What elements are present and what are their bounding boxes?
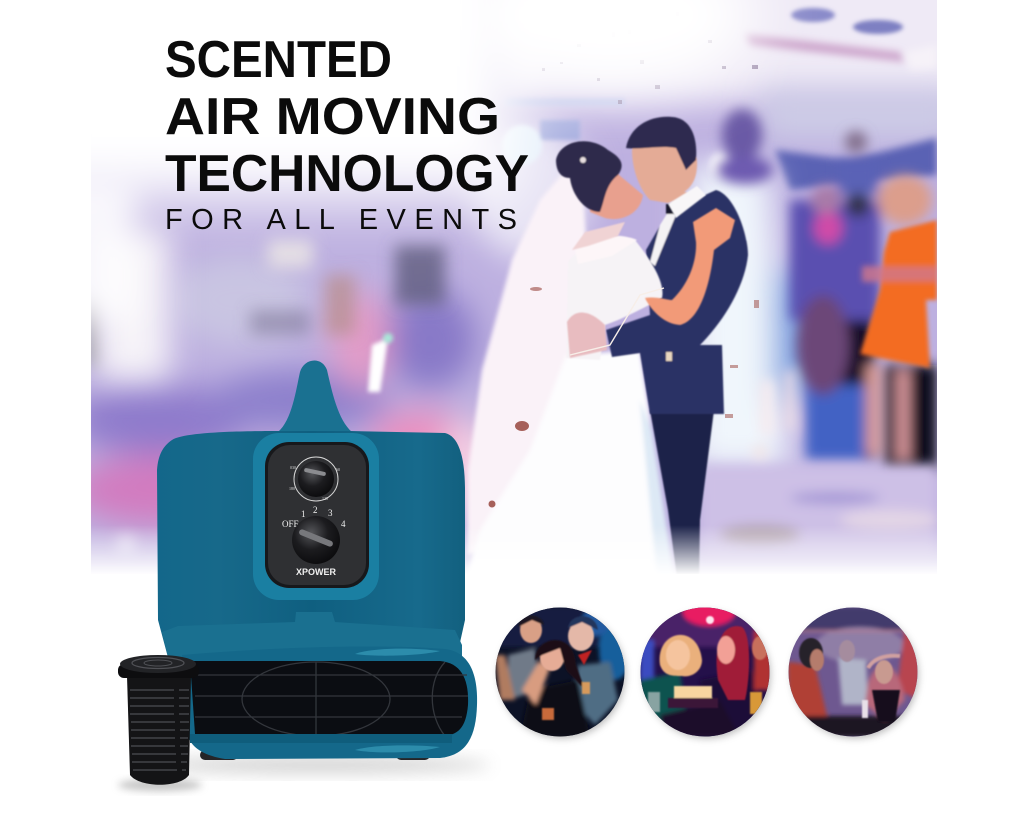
bride bodice xyxy=(578,235,664,359)
brand: XPOWER xyxy=(296,567,336,578)
bride arm xyxy=(645,208,735,325)
timer knob xyxy=(298,461,334,497)
blurred crowd left xyxy=(86,240,445,551)
main housing xyxy=(157,431,465,665)
title line 2: AIR MOVING xyxy=(165,88,500,146)
timer labels: 60 xyxy=(336,467,340,472)
control panel xyxy=(265,442,369,588)
front outlet lip xyxy=(182,647,477,759)
groom neck and face xyxy=(626,117,706,218)
groom trousers xyxy=(650,410,714,585)
timer dial ring xyxy=(294,457,338,501)
scent cartridge xyxy=(118,655,199,785)
speed labels: 2 xyxy=(313,505,318,515)
fade overlays xyxy=(20,0,760,320)
couple xyxy=(462,117,759,590)
crowd right xyxy=(717,109,937,470)
confetti on dress xyxy=(488,287,759,508)
top right ceiling xyxy=(500,0,980,190)
timer labels: 030 xyxy=(290,465,296,470)
bride dress skirt xyxy=(470,350,672,570)
grille xyxy=(195,662,468,736)
bride veil xyxy=(467,168,590,555)
blower shadow xyxy=(150,757,490,773)
bottom fade xyxy=(91,525,937,575)
bright glow behind groom xyxy=(690,160,815,470)
groom hand on bride back xyxy=(567,313,607,358)
scent cartridge shadow xyxy=(118,779,202,791)
confetti xyxy=(542,40,758,104)
floor speckle xyxy=(701,448,937,547)
title line 3: TECHNOLOGY xyxy=(165,145,529,203)
title line 1: SCENTED xyxy=(165,31,392,89)
backdrop haze xyxy=(91,0,937,570)
cartridge cap xyxy=(118,664,199,678)
groom jacket xyxy=(606,190,748,414)
handle fin xyxy=(278,360,352,432)
timer labels: 120 xyxy=(322,496,328,501)
lip highlights xyxy=(355,649,440,656)
left white haze xyxy=(95,230,170,380)
photo: blurred wedding party scene xyxy=(20,0,980,591)
circle photo: friends partying xyxy=(495,607,631,737)
speed knob xyxy=(292,516,340,564)
speed labels: 3 xyxy=(328,508,333,518)
speed labels: 4 xyxy=(341,519,346,529)
speed labels: 1 xyxy=(301,509,306,519)
timer labels xyxy=(289,465,340,501)
circle photo: DJ party xyxy=(788,607,920,737)
subtitle: FOR ALL EVENTS xyxy=(165,204,517,236)
title xyxy=(165,31,529,236)
air mover blower xyxy=(157,360,477,760)
outlet opening xyxy=(190,661,468,743)
lower front shelf xyxy=(162,612,462,665)
cartridge slats xyxy=(130,690,189,770)
speed labels: OFF xyxy=(282,519,299,529)
orange dress xyxy=(860,220,937,368)
bride shawl lines xyxy=(570,288,664,355)
bride hair and face xyxy=(556,141,643,219)
bright flare xyxy=(368,333,393,392)
speed labels xyxy=(282,505,346,529)
feet xyxy=(200,750,238,760)
circle photo shadows xyxy=(499,612,918,738)
control surround xyxy=(253,433,379,600)
timer labels: 180 xyxy=(289,486,295,491)
bride back skin xyxy=(572,222,625,250)
circle photo: birthday cake xyxy=(640,598,772,737)
